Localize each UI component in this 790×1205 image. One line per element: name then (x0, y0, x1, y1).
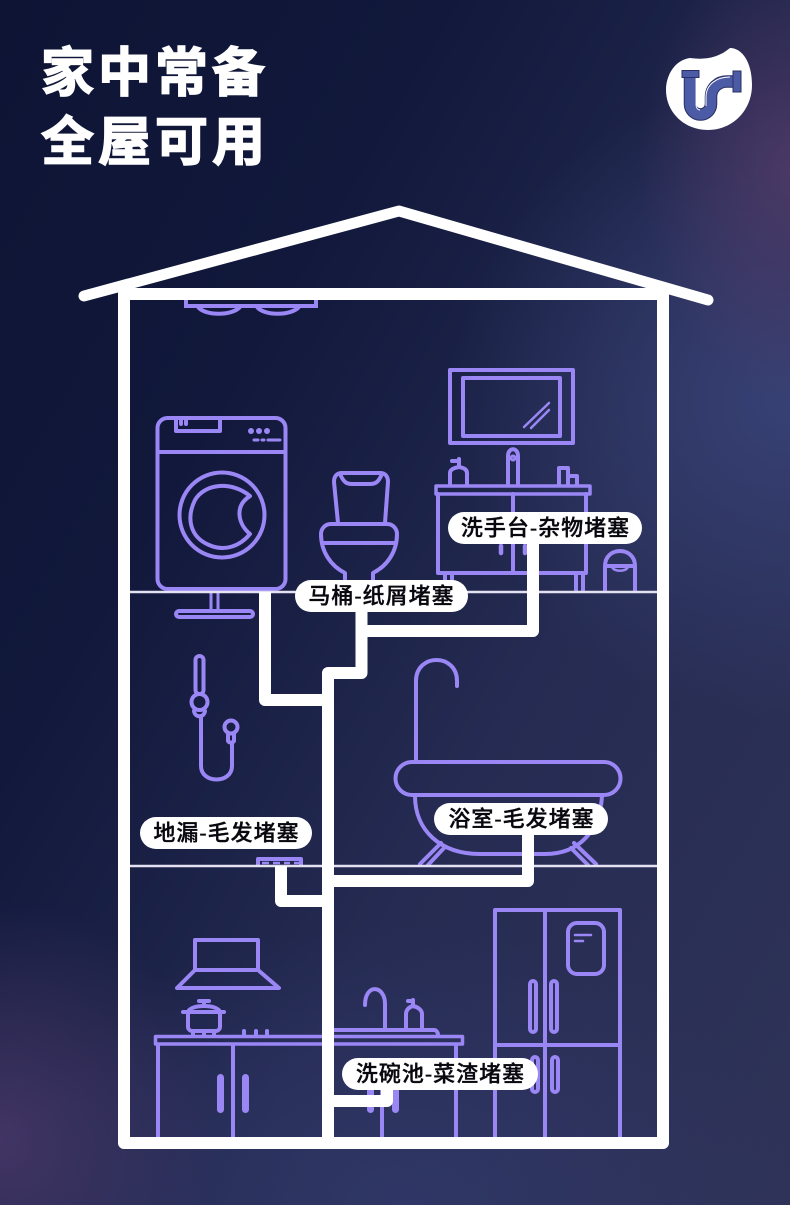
bathroom vanity and mirror (436, 370, 590, 590)
range hood and pot (177, 940, 279, 1035)
title: 全屋可用 (41, 113, 269, 172)
label: washbasin (448, 512, 642, 544)
label: toilet: 马桶-纸屑堵塞 (308, 584, 455, 608)
label: floor drain: 地漏-毛发堵塞 (153, 820, 300, 846)
ceiling lamp (186, 300, 316, 314)
label: dish sink (342, 1058, 538, 1090)
house outline (84, 211, 708, 1143)
label: bathtub (434, 803, 608, 835)
icon: pipe logo (666, 48, 752, 130)
bathtub (396, 660, 620, 865)
kitchen counter and cabinets (156, 989, 462, 1138)
title: 家中常备 (41, 44, 269, 103)
label: bathtub: 浴室-毛发堵塞 (448, 806, 595, 832)
refrigerator (495, 910, 620, 1138)
floor drain (258, 859, 301, 865)
shower (192, 656, 238, 780)
trash can (605, 551, 635, 591)
label: washbasin: 洗手台-杂物堵塞 (461, 516, 630, 540)
drain pipes (265, 540, 533, 1143)
washing machine (158, 418, 286, 617)
title (41, 44, 269, 172)
toilet (321, 473, 397, 590)
label: floor drain (140, 817, 312, 849)
floors (130, 592, 657, 866)
label: dish sink: 洗碗池-菜渣堵塞 (356, 1062, 525, 1086)
label: toilet (295, 580, 468, 612)
